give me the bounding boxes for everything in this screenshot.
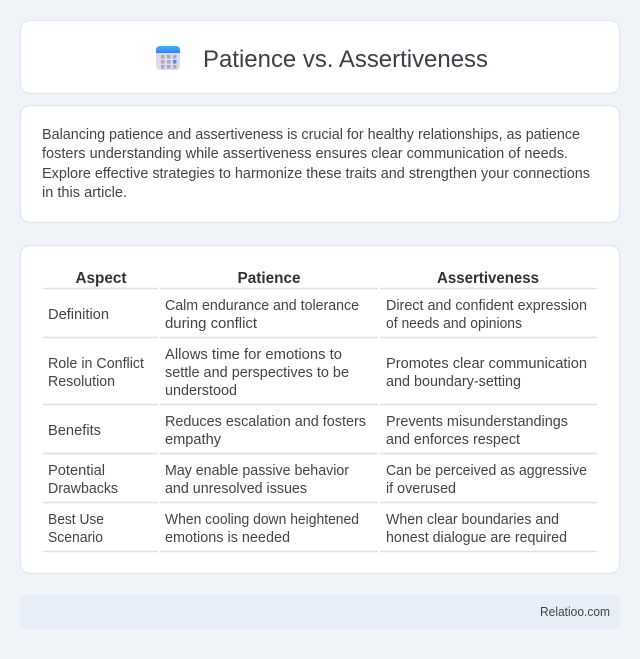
table header row: Assertiveness — [437, 270, 539, 287]
panel: title header — [20, 20, 620, 94]
table row: benefits — [48, 414, 568, 448]
table header row: Patience — [238, 270, 301, 287]
table row: best use scenario: Scenario — [48, 530, 103, 546]
table header row — [76, 270, 539, 287]
table row: best use scenario: When cooling down heightened — [165, 512, 359, 528]
table row: potential drawbacks: and unresolved issues — [165, 481, 307, 497]
table row: role in conflict resolution: understood — [165, 383, 237, 399]
table row: definition: Calm endurance and tolerance — [165, 298, 359, 314]
table row: potential drawbacks: May enable passive behavior — [165, 463, 349, 479]
panel: comparison table — [20, 246, 620, 574]
table row: role in conflict resolution: Resolution — [48, 374, 115, 390]
table row: role in conflict resolution — [48, 347, 587, 399]
table row: definition: of needs and opinions — [386, 316, 522, 332]
table row: best use scenario: Best Use — [48, 512, 104, 528]
table row: potential drawbacks: if overused — [386, 481, 456, 497]
panel: introduction — [20, 106, 620, 222]
table row: definition: Direct and confident expression — [386, 298, 587, 314]
table row: role in conflict resolution: settle and perspectives to be — [165, 365, 349, 381]
table row: benefits: Reduces escalation and fosters — [165, 414, 366, 430]
table row: potential drawbacks: Can be perceived as aggressive — [386, 463, 587, 479]
table row: potential drawbacks — [48, 463, 587, 497]
footer credit: Relatioo.com — [540, 605, 610, 619]
text block: introduction: Balancing patience and assertiveness is crucial for healthy relationships, as patience — [42, 127, 580, 143]
title: Patience vs. Assertiveness — [203, 46, 488, 73]
table row: potential drawbacks: Potential — [48, 463, 105, 479]
table row: best use scenario: emotions is needed — [165, 530, 290, 546]
table row: benefits: empathy — [165, 432, 222, 448]
table row: benefits: Benefits — [48, 423, 101, 439]
table row: role in conflict resolution: Allows time for emotions to — [165, 347, 342, 363]
table row: definition: Definition — [48, 307, 109, 323]
text block: introduction: fosters understanding while assertiveness ensures clear communication of needs. — [42, 146, 568, 162]
footer — [20, 595, 620, 629]
table row: best use scenario: When clear boundaries and — [386, 512, 559, 528]
text block: introduction — [42, 127, 590, 201]
text block: introduction: in this article. — [42, 185, 127, 201]
table row: definition — [48, 298, 587, 332]
table row: best use scenario: honest dialogue are required — [386, 530, 567, 546]
icon: calendar — [156, 46, 180, 70]
table row: role in conflict resolution: Role in Conflict — [48, 356, 144, 372]
table row: potential drawbacks: Drawbacks — [48, 481, 118, 497]
table row: role in conflict resolution: and boundary-setting — [386, 374, 521, 390]
table row: best use scenario — [48, 512, 567, 546]
table row: benefits: and enforces respect — [386, 432, 520, 448]
table row: role in conflict resolution: Promotes clear communication — [386, 356, 587, 372]
text block: introduction: Explore effective strategies to harmonize these traits and strengthen your connections — [42, 166, 590, 182]
table row: definition: during conflict — [165, 316, 257, 332]
table header row: Aspect — [76, 270, 127, 287]
table row: benefits: Prevents misunderstandings — [386, 414, 568, 430]
